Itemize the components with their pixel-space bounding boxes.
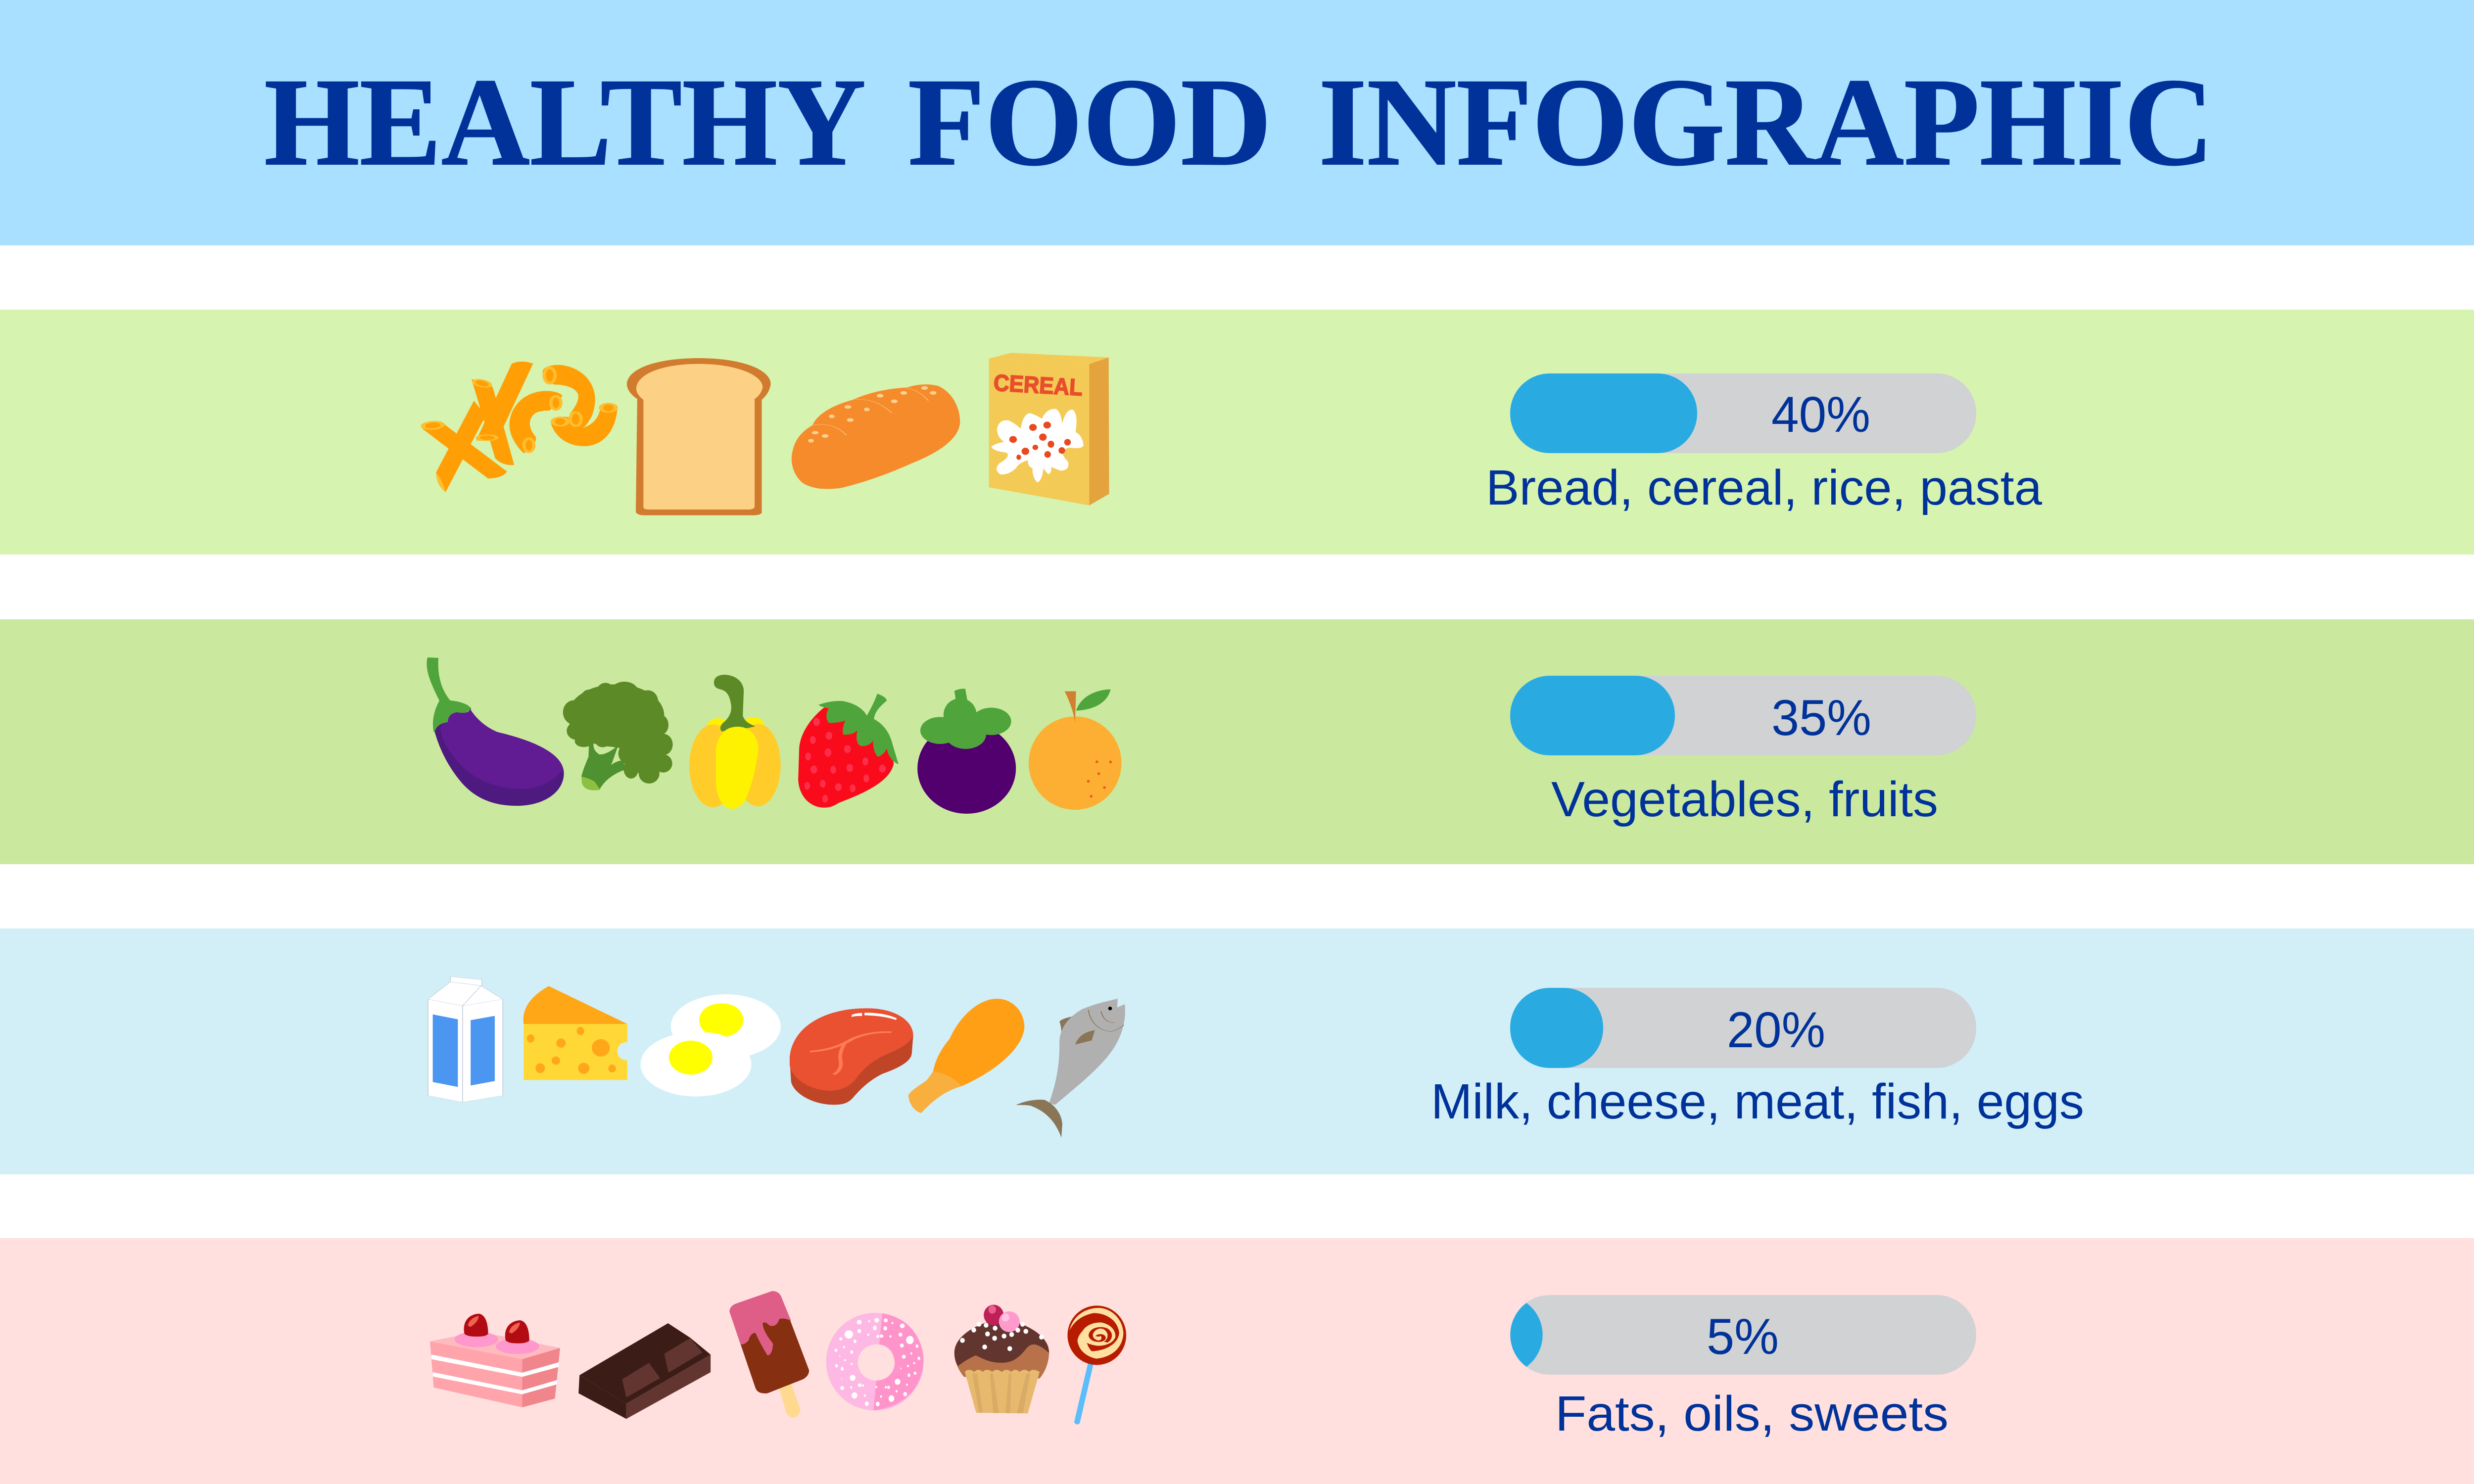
icon: fish: [1016, 999, 1125, 1138]
progress bar 40%: [1510, 373, 1976, 453]
label: Vegetables, fruits: [1551, 772, 1938, 827]
icon: layer cake: [430, 1314, 560, 1407]
panel: milk, cheese, meat, fish, eggs: [0, 928, 2474, 1174]
value 40%: 40%: [1771, 386, 1870, 443]
panel: fats, oils, sweets: [0, 1238, 2474, 1484]
icon: cereal box: [989, 353, 1109, 506]
icon: donut: [826, 1313, 924, 1410]
icon: milk carton: [428, 976, 503, 1102]
icon: bell pepper: [689, 675, 781, 809]
icon: bread loaf: [792, 384, 960, 489]
value 5%: 5%: [1707, 1308, 1779, 1365]
progress bar 5%: [1510, 1295, 1976, 1375]
icon: chicken drumstick: [908, 999, 1024, 1113]
icon: lollipop: [1067, 1305, 1126, 1425]
progress bar 35%: [1510, 676, 1976, 755]
label: Bread, cereal, rice, pasta: [1486, 460, 2042, 515]
icon: pasta: [416, 362, 618, 492]
icon: orange: [1029, 689, 1122, 810]
icon: fried eggs: [641, 994, 781, 1097]
icon: ice pop: [729, 1291, 809, 1418]
icon: bread slice: [627, 358, 771, 515]
panel: vegetables, fruits: [0, 619, 2474, 864]
icon: broccoli: [563, 682, 673, 790]
value 20%: 20%: [1727, 1002, 1825, 1058]
value 35%: 35%: [1771, 690, 1871, 746]
title: FOOD: [908, 52, 1272, 191]
label: Fats, oils, sweets: [1555, 1386, 1949, 1441]
title: HEALTHY: [264, 52, 866, 191]
icon: chocolate bar: [578, 1323, 711, 1419]
icon: cupcake: [954, 1305, 1049, 1413]
label: Milk, cheese, meat, fish, eggs: [1431, 1074, 2084, 1129]
icon: cereal box: CEREAL: [993, 369, 1083, 401]
icon: strawberry: [798, 694, 899, 808]
icon: steak: [790, 1008, 913, 1105]
title: [264, 52, 2214, 191]
icon: cheese: [523, 986, 627, 1080]
panel: bread, cereal, rice, pasta: [0, 310, 2474, 555]
progress bar 20%: [1510, 988, 1976, 1068]
icon: eggplant: [427, 657, 564, 806]
icon: mangosteen: [917, 689, 1016, 814]
header band with title: [0, 0, 2474, 245]
title: INFOGRAPHIC: [1319, 52, 2214, 191]
